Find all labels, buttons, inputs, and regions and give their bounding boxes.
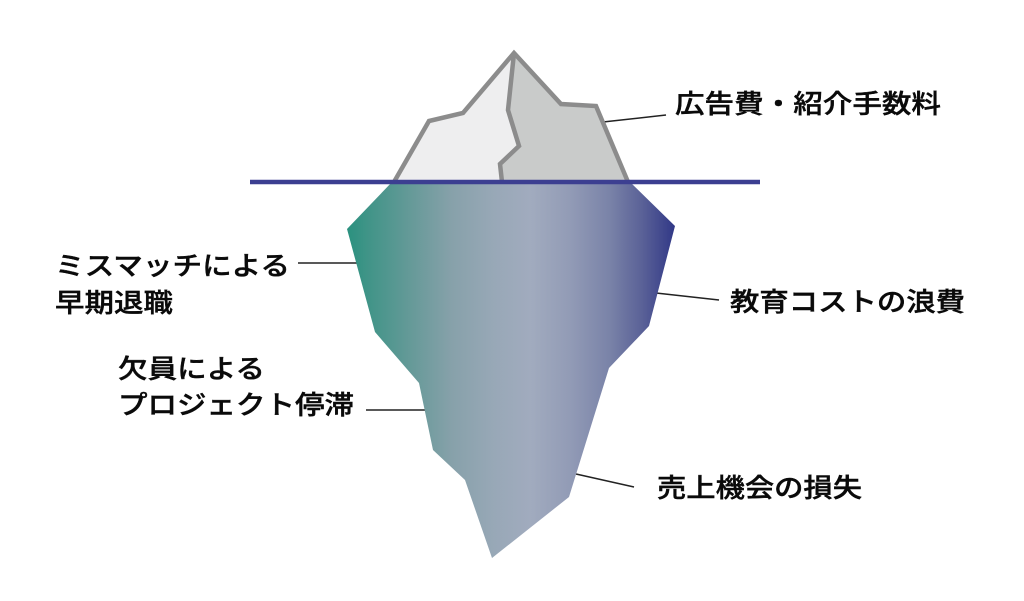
visible iceberg tip	[394, 53, 628, 182]
label: early turnover from mismatch	[55, 251, 290, 318]
label: advertising and referral fees: 広告費・紹介手数料	[675, 89, 941, 119]
leader lines	[298, 115, 719, 487]
label: lost sales opportunities: 売上機会の損失	[657, 473, 862, 503]
outline	[394, 53, 628, 182]
left face	[394, 53, 519, 182]
label: project stagnation from vacancy: 欠員による	[118, 354, 265, 384]
right face	[500, 53, 628, 182]
label: project stagnation from vacancy: プロジェクト停滞	[118, 390, 354, 420]
label: early turnover from mismatch: 早期退職	[55, 288, 173, 318]
crack line	[500, 53, 519, 182]
label: wasted training cost: 教育コストの浪費	[730, 287, 965, 317]
label: early turnover from mismatch: ミスマッチによる	[55, 251, 290, 281]
submerged iceberg	[347, 182, 675, 558]
waterline	[250, 180, 760, 184]
label: project stagnation from vacancy	[118, 354, 354, 420]
